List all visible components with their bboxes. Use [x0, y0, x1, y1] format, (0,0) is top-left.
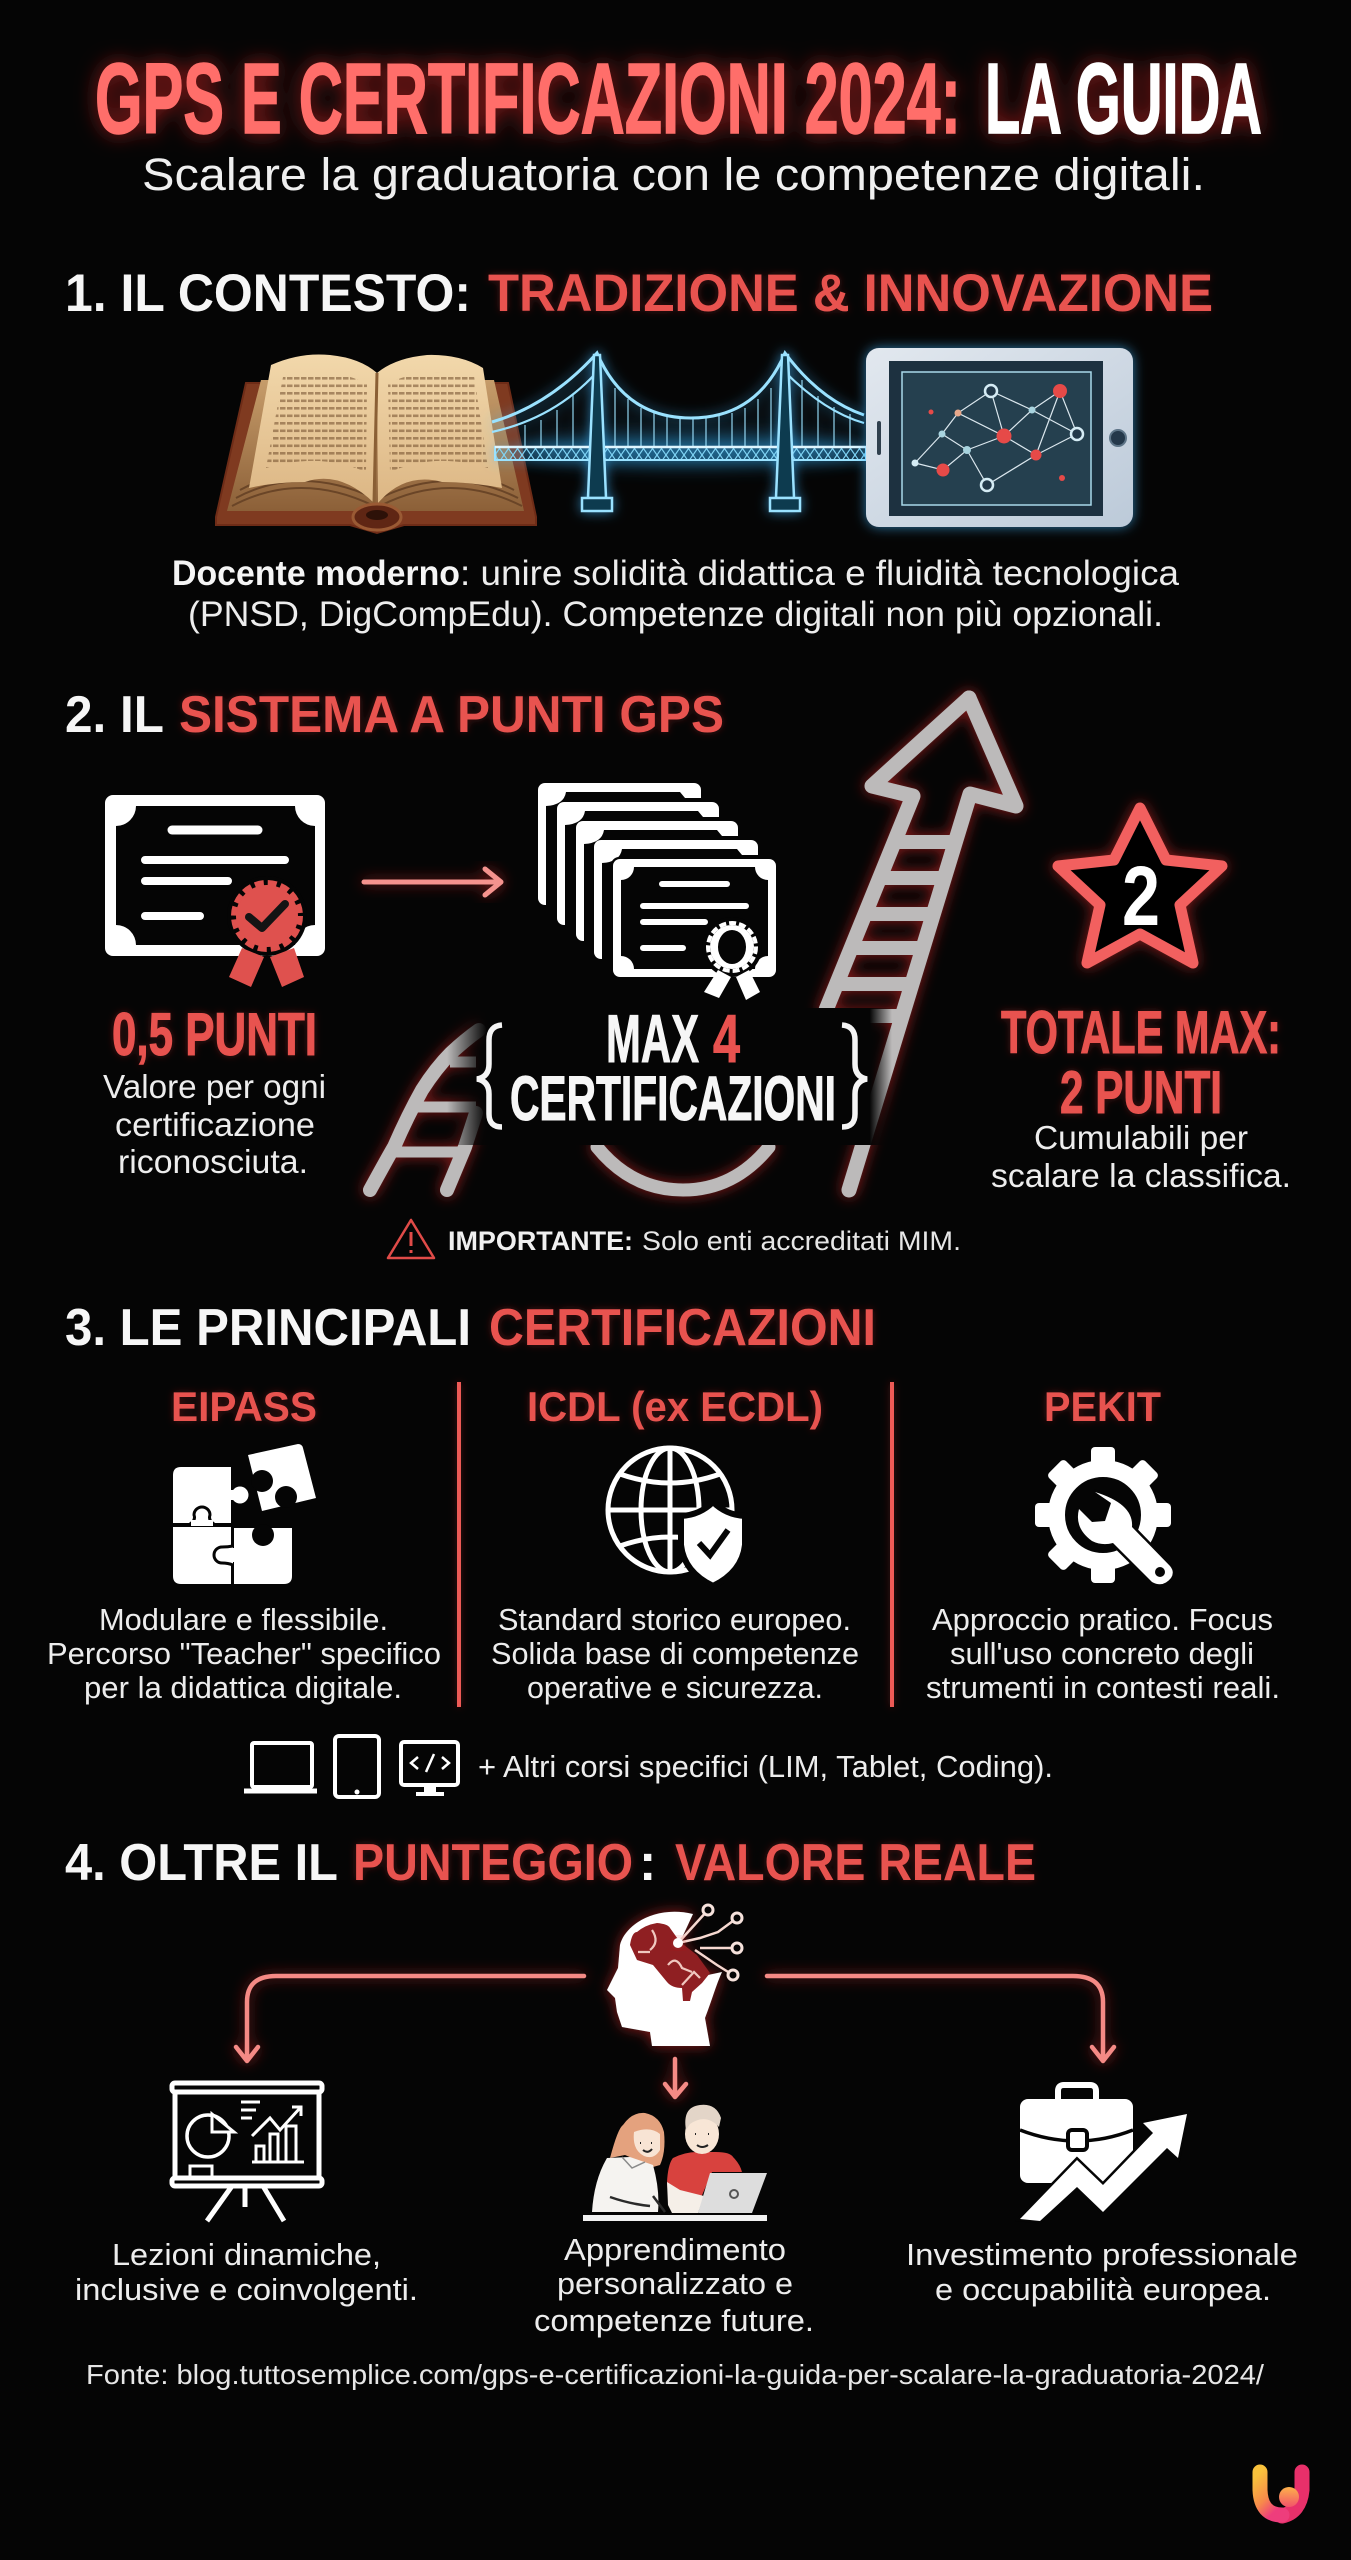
heading: section 1: TRADIZIONE & INNOVAZIONE [488, 264, 1213, 323]
stat: 0,5 punti: riconosciuta. [118, 1143, 308, 1180]
column: ICDL: ICDL (ex ECDL) [527, 1383, 823, 1430]
heading: section 4: VALORE REALE [675, 1834, 1036, 1892]
heading: section 3: 3. LE PRINCIPALI [65, 1299, 471, 1357]
heading: section 4: 4. OLTRE IL [65, 1834, 338, 1892]
column: lessons: inclusive e coinvolgenti. [75, 2272, 418, 2307]
heading: section 2: 2. IL [65, 686, 164, 744]
stat: total max: scalare la classifica. [991, 1157, 1291, 1194]
icon: tablet with network [866, 348, 1133, 527]
icon: presentation board [172, 2083, 322, 2221]
column: PEKIT: Approccio pratico. Focus [932, 1602, 1273, 1637]
column: EIPASS [47, 1383, 441, 1705]
column: investment: e occupabilità europea. [935, 2272, 1271, 2307]
icon: logo [1260, 2472, 1302, 2516]
column: learning: competenze future. [534, 2303, 814, 2338]
panel: section 2 points system [65, 686, 1291, 1258]
heading: section 3 [65, 1299, 876, 1357]
column: investment [906, 2085, 1298, 2307]
icon: gear with wrench [1035, 1447, 1173, 1584]
column: PEKIT: PEKIT [1044, 1383, 1161, 1430]
mask behind max label [447, 1008, 892, 1145]
icon: open book [216, 354, 536, 533]
icon: star 2: 2 [1122, 849, 1160, 943]
column: lessons [75, 2083, 418, 2307]
icon: briefcase with arrow [1020, 2085, 1187, 2221]
icon: monitor code [401, 1742, 458, 1796]
icon: brain head [607, 1905, 742, 2046]
icon: digital bridge [492, 353, 866, 511]
text: modern teacher: Docente moderno [172, 554, 460, 593]
source line: Fonte: blog.tuttosemplice.com/gps-e-certificazioni-la-guida-per-scalare-la-graduatoria-2024/ [86, 2359, 1264, 2390]
icon: certificate with red seal [105, 795, 325, 987]
column: PEKIT: strumenti in contesti reali. [926, 1670, 1280, 1705]
heading: section 1 [65, 264, 1213, 323]
stat: total max [991, 999, 1291, 1194]
icon: tablet [335, 1736, 379, 1797]
note: important [388, 1220, 961, 1258]
column: EIPASS: per la didattica digitale. [84, 1670, 402, 1705]
column: PEKIT [926, 1383, 1280, 1705]
stat: total max: Cumulabili per [1034, 1119, 1248, 1156]
stat: 0,5 punti [103, 1001, 326, 1180]
other courses row: + Altri corsi specifici (LIM, Tablet, Coding). [478, 1749, 1053, 1784]
label: max 4 certifications [477, 1001, 867, 1134]
heading: section 4: PUNTEGGIO [353, 1834, 633, 1892]
heading: section 4: : [639, 1834, 656, 1892]
icon: globe with shield [608, 1448, 745, 1586]
column: investment: Investimento professionale [906, 2237, 1298, 2272]
text: modern teacher: (PNSD, DigCompEdu). Competenze digitali non più opzionali. [188, 595, 1163, 634]
column: ICDL: Standard storico europeo. [498, 1602, 851, 1637]
text: modern teacher [172, 554, 1180, 634]
panel: section 1 context [65, 264, 1213, 634]
stat: 0,5 punti: 0,5 PUNTI [112, 1001, 317, 1068]
heading: section 2: SISTEMA A PUNTI GPS [179, 686, 724, 744]
icon: two learners with laptop [583, 2105, 767, 2221]
panel: section 3 certifications [47, 1299, 1280, 1797]
subtitle: Scalare la graduatoria con le competenze digitali. [142, 149, 1205, 200]
note: important: Solo enti accreditati MIM. [642, 1226, 961, 1256]
column: EIPASS: Modulare e flessibile. [99, 1602, 388, 1637]
text: modern teacher: : unire solidità didattica e fluidità tecnologica [460, 554, 1180, 593]
panel: section 4 real value [65, 1834, 1298, 2338]
heading: section 1: 1. IL CONTESTO: [65, 264, 471, 323]
arrows: from head [236, 1976, 1114, 2097]
stat: total max: 2 PUNTI [1060, 1059, 1222, 1126]
column: lessons: Lezioni dinamiche, [112, 2237, 381, 2272]
column: ICDL: Solida base di competenze [491, 1636, 859, 1671]
icon: puzzle [173, 1444, 316, 1584]
arrow: single to stack [364, 869, 501, 895]
icon: stack of certificates [538, 783, 812, 1000]
stat: 0,5 punti: certificazione [115, 1106, 315, 1143]
column: learning [534, 2105, 814, 2338]
stat: 0,5 punti: Valore per ogni [103, 1068, 326, 1105]
note: important: IMPORTANTE: [448, 1226, 633, 1256]
heading: section 4 [65, 1834, 1036, 1892]
icon: laptop [244, 1743, 317, 1791]
illustration: ladder arrow [370, 698, 1016, 1190]
heading: section 3: CERTIFICAZIONI [489, 1299, 876, 1357]
label: max 4 certifications: MAX [606, 1001, 699, 1077]
column: ICDL [491, 1383, 859, 1705]
column: learning: personalizzato e [557, 2266, 793, 2301]
dividers [459, 1382, 892, 1707]
column: ICDL: operative e sicurezza. [527, 1670, 823, 1705]
column: EIPASS: Percorso "Teacher" specifico [47, 1636, 441, 1671]
label: max 4 certifications: 4 [713, 1001, 740, 1077]
icon: star 2 [1058, 808, 1222, 963]
column: PEKIT: sull'uso concreto degli [950, 1636, 1254, 1671]
label: max 4 certifications: CERTIFICAZIONI [510, 1064, 836, 1134]
column: EIPASS: EIPASS [171, 1383, 317, 1430]
column: learning: Apprendimento [564, 2232, 786, 2267]
other courses row [244, 1736, 1053, 1797]
